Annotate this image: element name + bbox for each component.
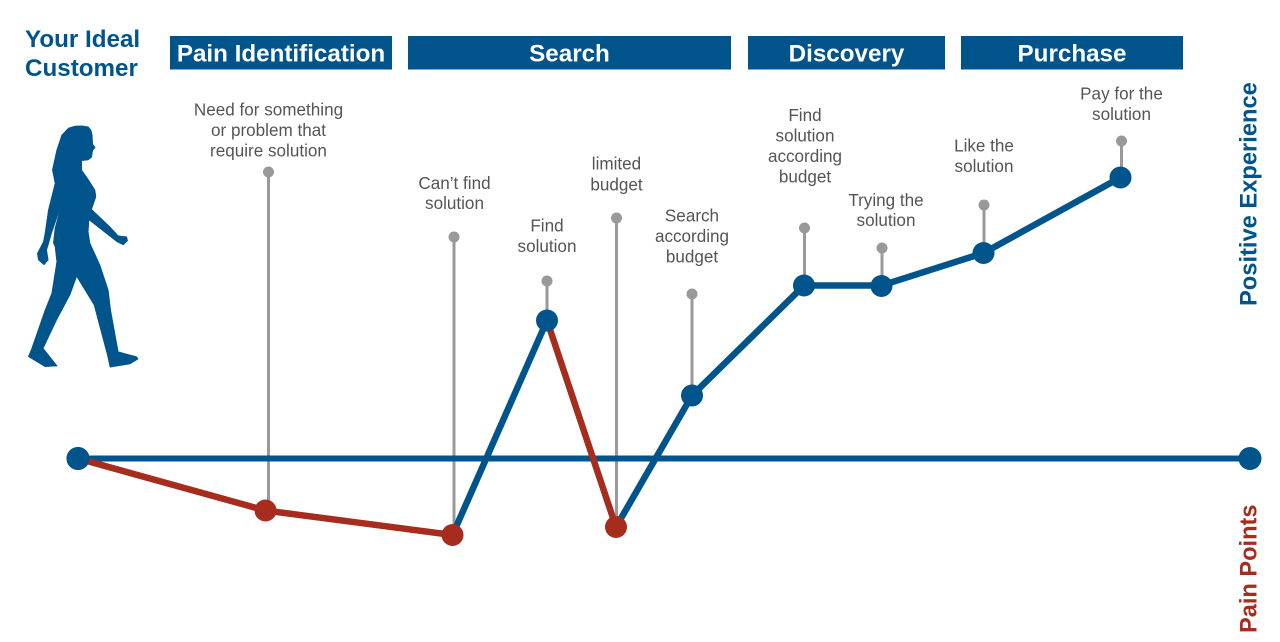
axis label: positive experience: Positive Experience: [1236, 82, 1262, 306]
header: purchase: [961, 36, 1183, 70]
label: like the solution: solution: [955, 157, 1013, 176]
axis label: pain points: Pain Points: [1236, 505, 1262, 633]
label: can't find solution: solution: [425, 194, 484, 213]
baseline axis: [66, 447, 1262, 470]
label: can't find solution: Can’t find: [418, 174, 491, 193]
label: find solution according budget: Find: [788, 106, 822, 125]
label: search according budget: budget: [666, 248, 718, 266]
header: discovery: [748, 36, 945, 70]
label: trying the solution: solution: [857, 211, 915, 230]
label: limited budget: budget: [590, 176, 643, 194]
label: need for something: or problem that: [211, 121, 326, 140]
label: search according budget: Search: [665, 206, 719, 226]
title: your ideal customer: [25, 26, 140, 82]
leader lines: [263, 136, 1127, 534]
label: find solution according budget: according: [768, 147, 842, 166]
label: find solution according budget: solution: [776, 126, 834, 146]
title: your ideal customer: Customer: [25, 55, 138, 82]
header: purchase: Purchase: [1018, 40, 1126, 68]
title: your ideal customer: Your Ideal: [25, 26, 140, 53]
label: need for something: require solution: [210, 142, 327, 160]
label: limited budget: limited: [592, 154, 641, 174]
label: need for something: Need for something: [194, 100, 343, 120]
header: search: [408, 36, 731, 70]
label: find solution: Find: [530, 216, 564, 236]
journey line: [66, 166, 1132, 546]
label: pay for the solution: solution: [1092, 105, 1151, 124]
header: discovery: Discovery: [789, 40, 905, 68]
label: trying the solution: Trying the: [848, 191, 924, 210]
label: like the solution: Like the: [954, 136, 1014, 156]
label: pay for the solution: Pay for the: [1080, 84, 1163, 104]
icon: walking woman silhouette: [28, 126, 138, 367]
header: pain identification: Pain Identification: [177, 40, 385, 68]
header: search: Search: [529, 40, 610, 68]
label: find solution: solution: [518, 237, 576, 256]
label: find solution according budget: budget: [779, 168, 831, 186]
label: search according budget: according: [655, 227, 729, 246]
